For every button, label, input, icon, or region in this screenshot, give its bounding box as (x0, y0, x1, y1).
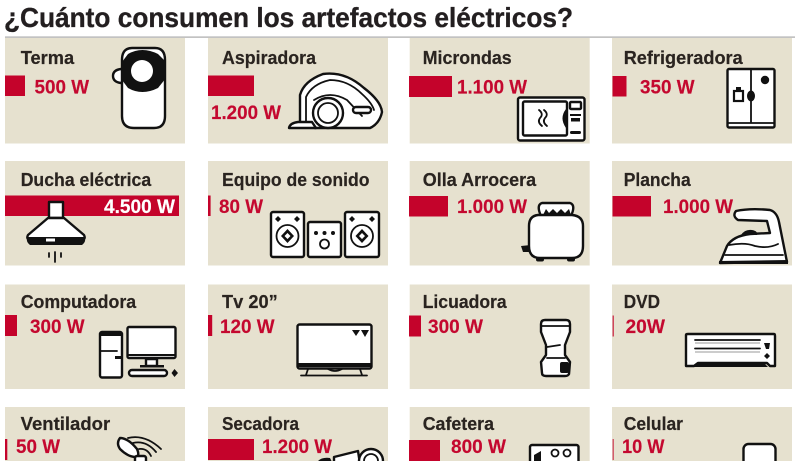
name: Ventilador: Ventilador (21, 413, 110, 434)
bar: 1.100 W (409, 76, 452, 97)
value: 500 W: 500 W (34, 78, 89, 98)
bar: 20W (612, 316, 614, 336)
panel: Microndas (409, 38, 590, 144)
name: Refrigeradora: Refrigeradora (624, 47, 743, 68)
name: Plancha: Plancha (624, 169, 691, 190)
bar: 10 W (612, 439, 614, 460)
value: 1.200 W: 1.200 W (211, 103, 281, 124)
icon: cell phone (744, 444, 776, 469)
name: Microndas: Microndas (423, 47, 512, 68)
icon: sound system (271, 212, 379, 257)
panel: Plancha (612, 161, 792, 266)
panel: Aspiradora (208, 38, 388, 144)
bar: 300 W (409, 316, 421, 336)
bar: 500 W (5, 76, 25, 96)
name: DVD: DVD (624, 291, 660, 312)
panel: Equipo de sonido (208, 161, 388, 266)
value: 1.100 W: 1.100 W (457, 78, 527, 98)
icon: coffee maker (530, 445, 578, 469)
name: Aspiradora: Aspiradora (222, 47, 317, 68)
name: Licuadora: Licuadora (423, 291, 507, 312)
panel: Ducha eléctrica (5, 161, 185, 266)
panel: Refrigeradora (612, 38, 792, 144)
bar: 4.500 W (5, 196, 179, 216)
icon: iron (719, 209, 788, 264)
name: Ducha eléctrica: Ducha eléctrica (21, 169, 152, 190)
value: 300 W: 300 W (30, 317, 85, 338)
icon: rice cooker (521, 203, 583, 262)
title: ¿Cuánto consumen los artefactos eléctricos? (4, 2, 573, 33)
value: 120 W: 120 W (220, 317, 275, 338)
name: Terma: Terma (21, 47, 75, 68)
value: 800 W: 800 W (451, 437, 506, 458)
panel: Terma (5, 38, 185, 144)
bar: 1.200 W (208, 439, 254, 460)
value: 1.000 W: 1.000 W (663, 197, 733, 218)
value: 80 W: 80 W (219, 197, 263, 218)
panel: Celular (612, 407, 792, 469)
icon: microwave (518, 98, 584, 140)
panel: Ventilador (5, 407, 185, 466)
value: 1.000 W: 1.000 W (457, 197, 527, 218)
bar: 300 W (5, 315, 17, 336)
icon: hood (27, 202, 85, 262)
value: 1.200 W: 1.200 W (262, 437, 332, 458)
bar: 120 W (208, 315, 212, 336)
value: 300 W: 300 W (428, 317, 483, 338)
icon: hair dryer (318, 449, 383, 469)
panel: Licuadora (409, 284, 590, 389)
icon: refrigerator (728, 69, 774, 128)
panel: Secadora (208, 407, 388, 469)
value: 10 W: 10 W (622, 437, 665, 458)
panel: DVD (612, 284, 792, 389)
bar: 350 W (612, 76, 626, 96)
name: Tv 20": Tv 20” (222, 291, 278, 312)
bar: 1.000 W (612, 196, 651, 216)
name: Cafetera: Cafetera (423, 413, 495, 434)
panel: Olla Arrocera (409, 161, 590, 266)
icon: computer (100, 327, 178, 378)
name: Olla Arrocera: Olla Arrocera (423, 169, 537, 190)
bar: 1.000 W (409, 196, 448, 216)
icon: vacuum cleaner (289, 74, 382, 128)
bar: 80 W (208, 196, 211, 216)
icon: fan (118, 437, 161, 466)
panel: Cafetera (409, 407, 590, 469)
icon: blender (541, 320, 570, 376)
value: 350 W: 350 W (640, 78, 695, 98)
value: 4.500 W: 4.500 W (104, 197, 175, 218)
name: Equipo de sonido: Equipo de sonido (222, 169, 370, 190)
name: Celular: Celular (624, 413, 683, 434)
panel: Tv 20" (208, 284, 388, 389)
bar: 1.200 W (208, 76, 254, 96)
name: Secadora: Secadora (222, 413, 300, 434)
icon: dvd player (686, 334, 775, 367)
bar: 800 W (409, 440, 440, 461)
bar: 50 W (5, 439, 7, 460)
icon: television (297, 324, 372, 376)
icon: water heater (113, 48, 166, 128)
panel: Computadora (5, 284, 185, 389)
name: Computadora: Computadora (21, 291, 137, 312)
value: 50 W: 50 W (16, 437, 60, 458)
value: 20W: 20W (626, 317, 665, 338)
